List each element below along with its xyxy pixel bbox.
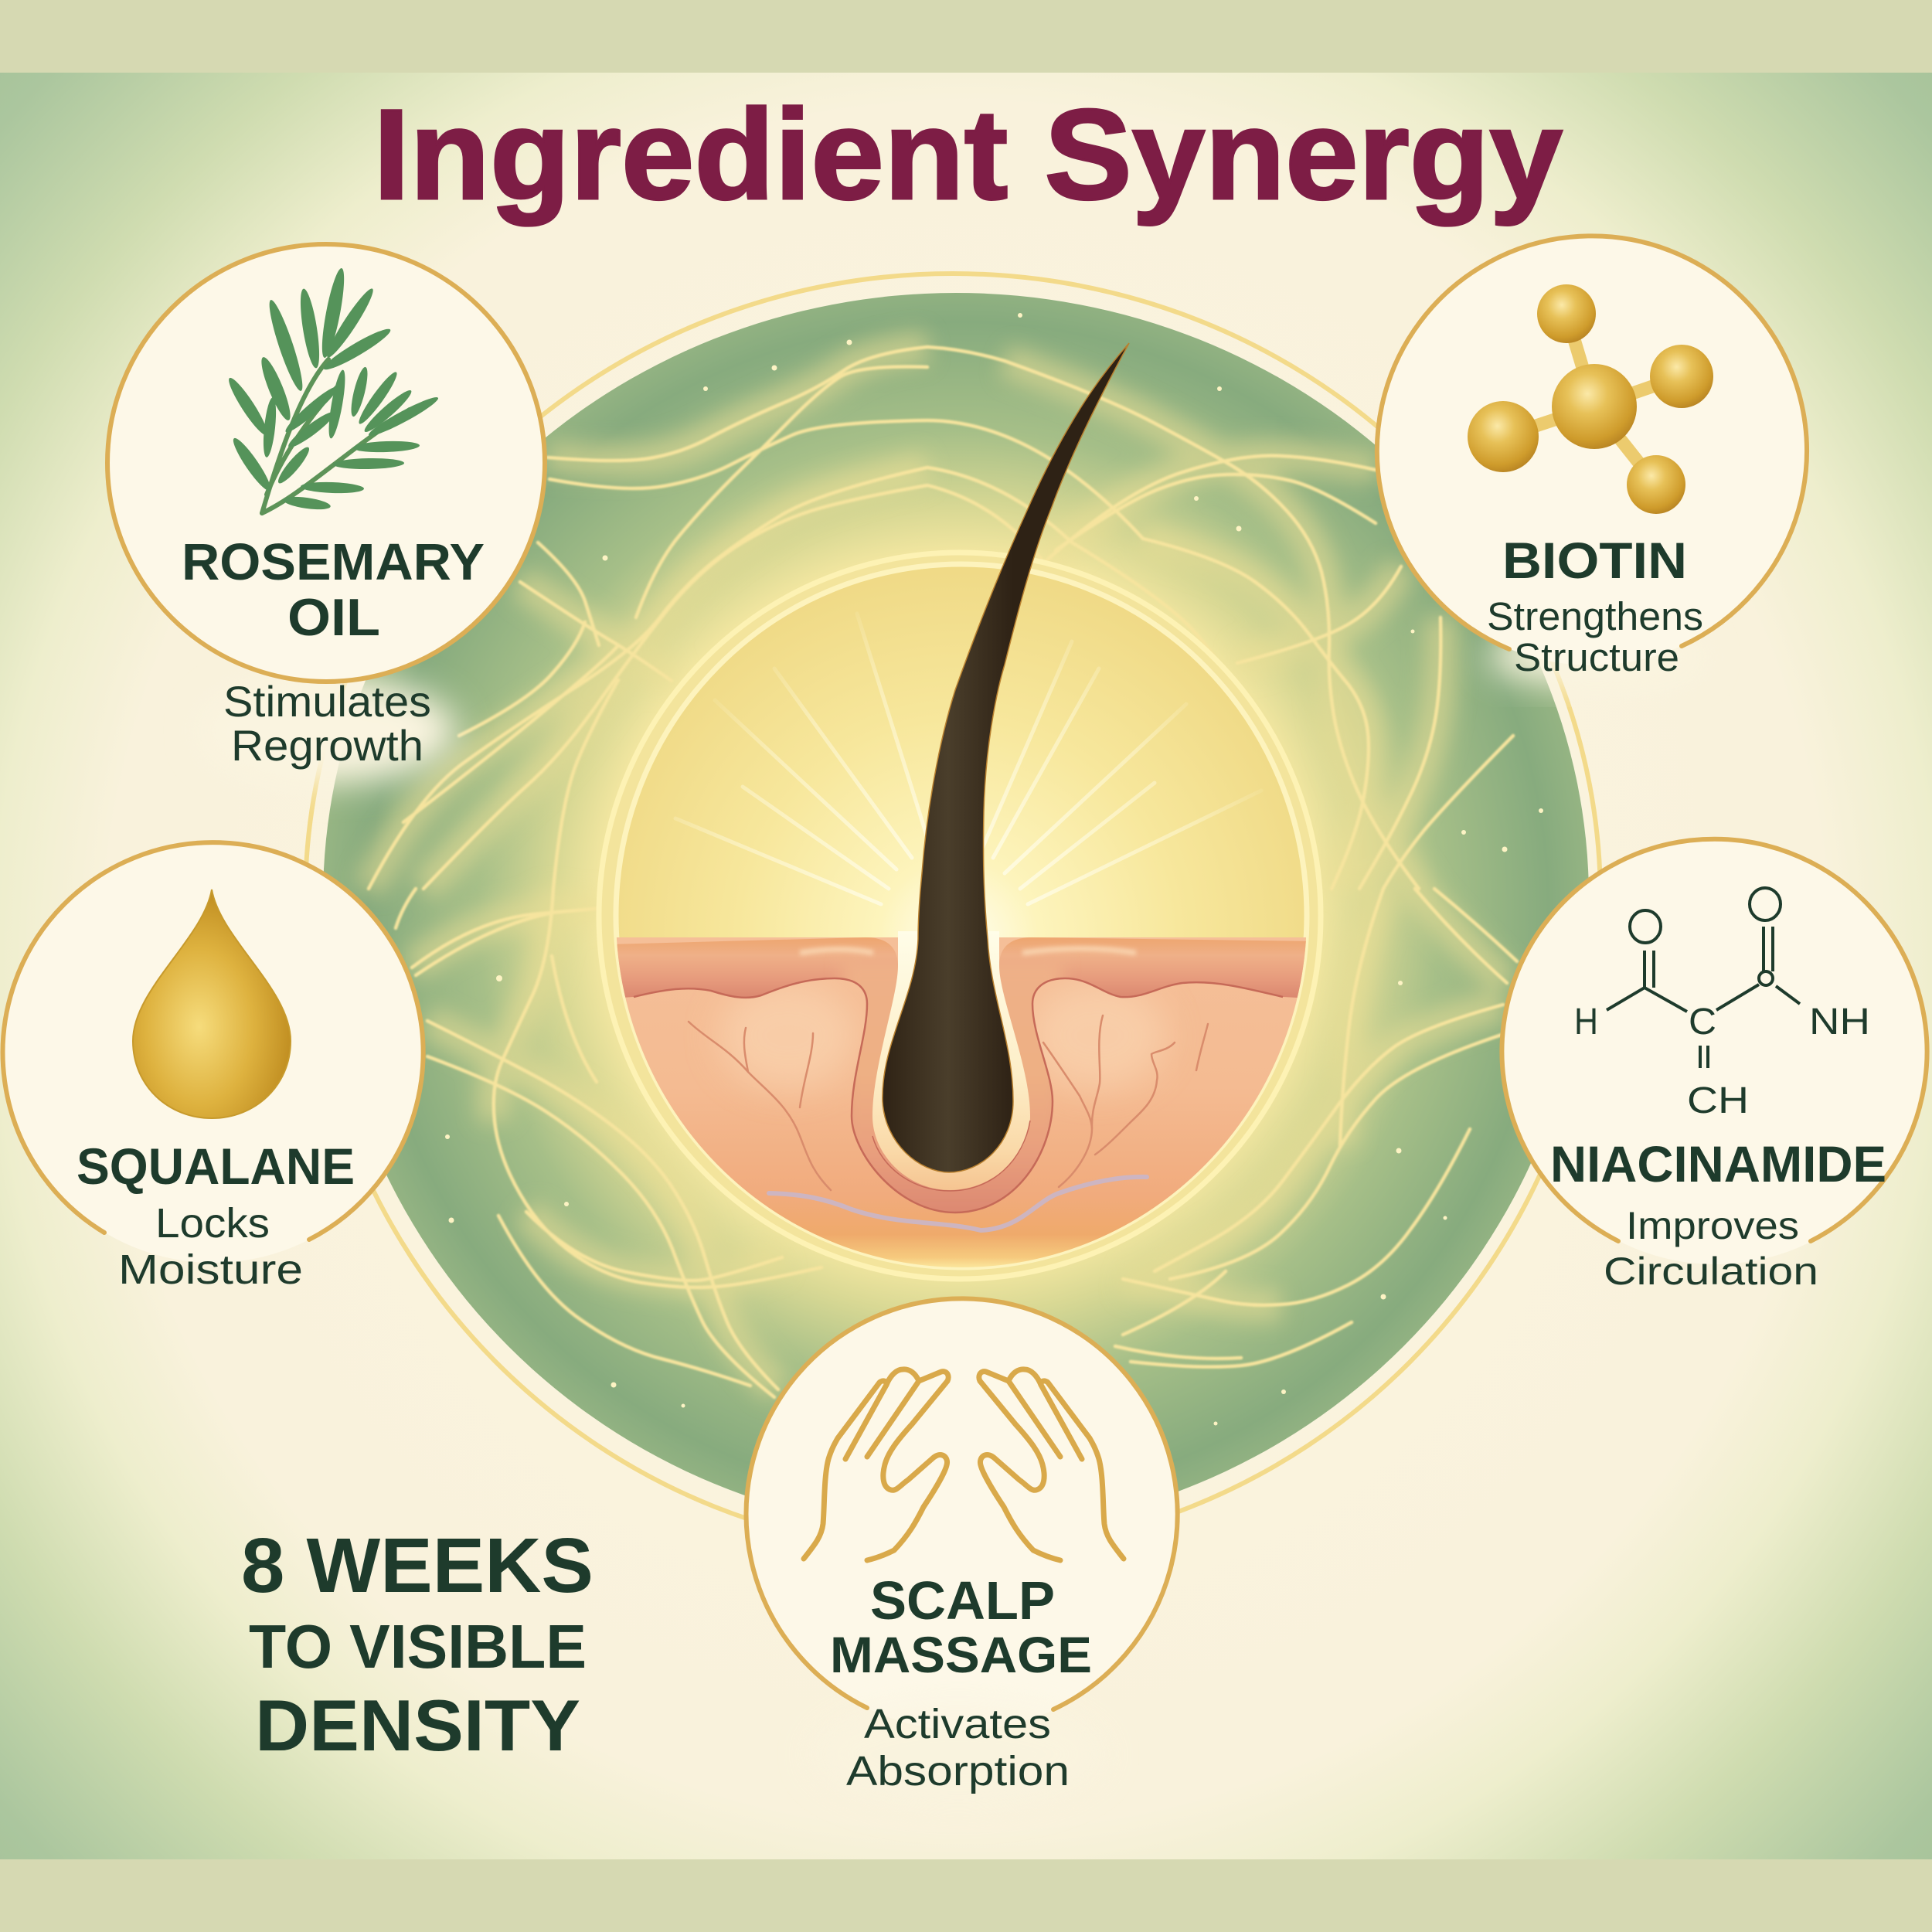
right hand (979, 1369, 1124, 1560)
heading line 2: OIL (287, 588, 380, 647)
follicle channel lining (872, 931, 1030, 1190)
icon: oil drop (133, 889, 291, 1118)
top band (0, 0, 1932, 73)
wavy dermal line (634, 978, 1283, 1213)
left hand (804, 1369, 948, 1560)
caption line 2: Structure (1514, 635, 1679, 679)
caption line 2: Regrowth (231, 721, 423, 770)
outer ring (305, 274, 1600, 1553)
skin layers (611, 931, 1306, 1270)
light rays (675, 614, 1261, 904)
band highlights (800, 949, 1136, 953)
lighter dermis patch right (1028, 981, 1167, 1090)
cream patch behind rosemary caption (201, 678, 456, 783)
badge ring (1377, 236, 1807, 649)
icon: chemical structure (1574, 888, 1870, 1121)
badge fill (747, 1299, 1178, 1730)
caption line 2: Absorption (846, 1748, 1070, 1794)
icon: massaging hands (804, 1369, 1124, 1560)
panel: rosemary oil (107, 244, 545, 770)
fibres (369, 347, 1517, 1397)
title: Ingredient Synergy (373, 83, 1563, 226)
heading: BIOTIN (1502, 532, 1687, 589)
heading: SQUALANE (77, 1138, 355, 1195)
icon: rosemary sprig (224, 267, 440, 513)
panel: squalane (3, 842, 423, 1293)
heading: NIACINAMIDE (1550, 1135, 1886, 1192)
badge ring (1502, 839, 1927, 1241)
icon: molecule (1468, 284, 1713, 514)
veins (689, 1015, 1208, 1190)
glowing outer inner-ring (599, 553, 1321, 1279)
icon: chemical structure: H (1574, 1002, 1598, 1043)
caption line 2: Circulation (1604, 1250, 1818, 1293)
panel: niacinamide (1502, 839, 1928, 1293)
callout: 8 weeks (241, 1522, 594, 1766)
panel: biotin (1377, 236, 1807, 679)
icon: chemical structure: CH (1687, 1080, 1749, 1121)
patch behind caption (811, 1700, 1105, 1808)
icon: chemical structure: NH (1809, 1002, 1870, 1043)
panel: scalp massage (747, 1298, 1178, 1808)
icon: chemical structure: C (1689, 1002, 1716, 1043)
heading line 2: MASSAGE (830, 1626, 1092, 1683)
scalp cross-section illustration (611, 343, 1307, 1270)
skin base (611, 937, 1306, 1270)
epidermis band and follicle sheath (611, 931, 1306, 1221)
bottom band (0, 1859, 1932, 1932)
callout: 8 weeks: TO VISIBLE (249, 1612, 587, 1681)
caption line 2: Moisture (118, 1247, 303, 1293)
cream patch behind biotin caption (1488, 629, 1704, 685)
badge ring (3, 842, 423, 1240)
badge fill (3, 842, 423, 1263)
caption: Stimulates (223, 677, 431, 726)
caption: Locks (155, 1200, 270, 1247)
heading: ROSEMARY (182, 533, 485, 591)
glow dome (616, 564, 1307, 1267)
specks (445, 313, 1543, 1425)
callout: 8 weeks: DENSITY (255, 1685, 580, 1766)
caption: Strengthens (1487, 594, 1703, 638)
badge circle (107, 244, 545, 682)
lavender membrane line (769, 1177, 1147, 1230)
badge fill (1377, 236, 1807, 665)
fibre glow (369, 347, 1507, 1389)
caption: Activates (864, 1701, 1051, 1747)
lining edge (872, 1121, 1030, 1191)
heading: SCALP (870, 1570, 1055, 1631)
badge ring (747, 1298, 1178, 1709)
green energy disk with golden fibres (323, 293, 1589, 1495)
hair shaft and bulb (883, 343, 1129, 1172)
lighter dermis patches (719, 981, 858, 1090)
caption: Improves (1626, 1204, 1799, 1247)
callout: 8 weeks: 8 WEEKS (241, 1522, 594, 1609)
badge fill (1503, 839, 1928, 1264)
